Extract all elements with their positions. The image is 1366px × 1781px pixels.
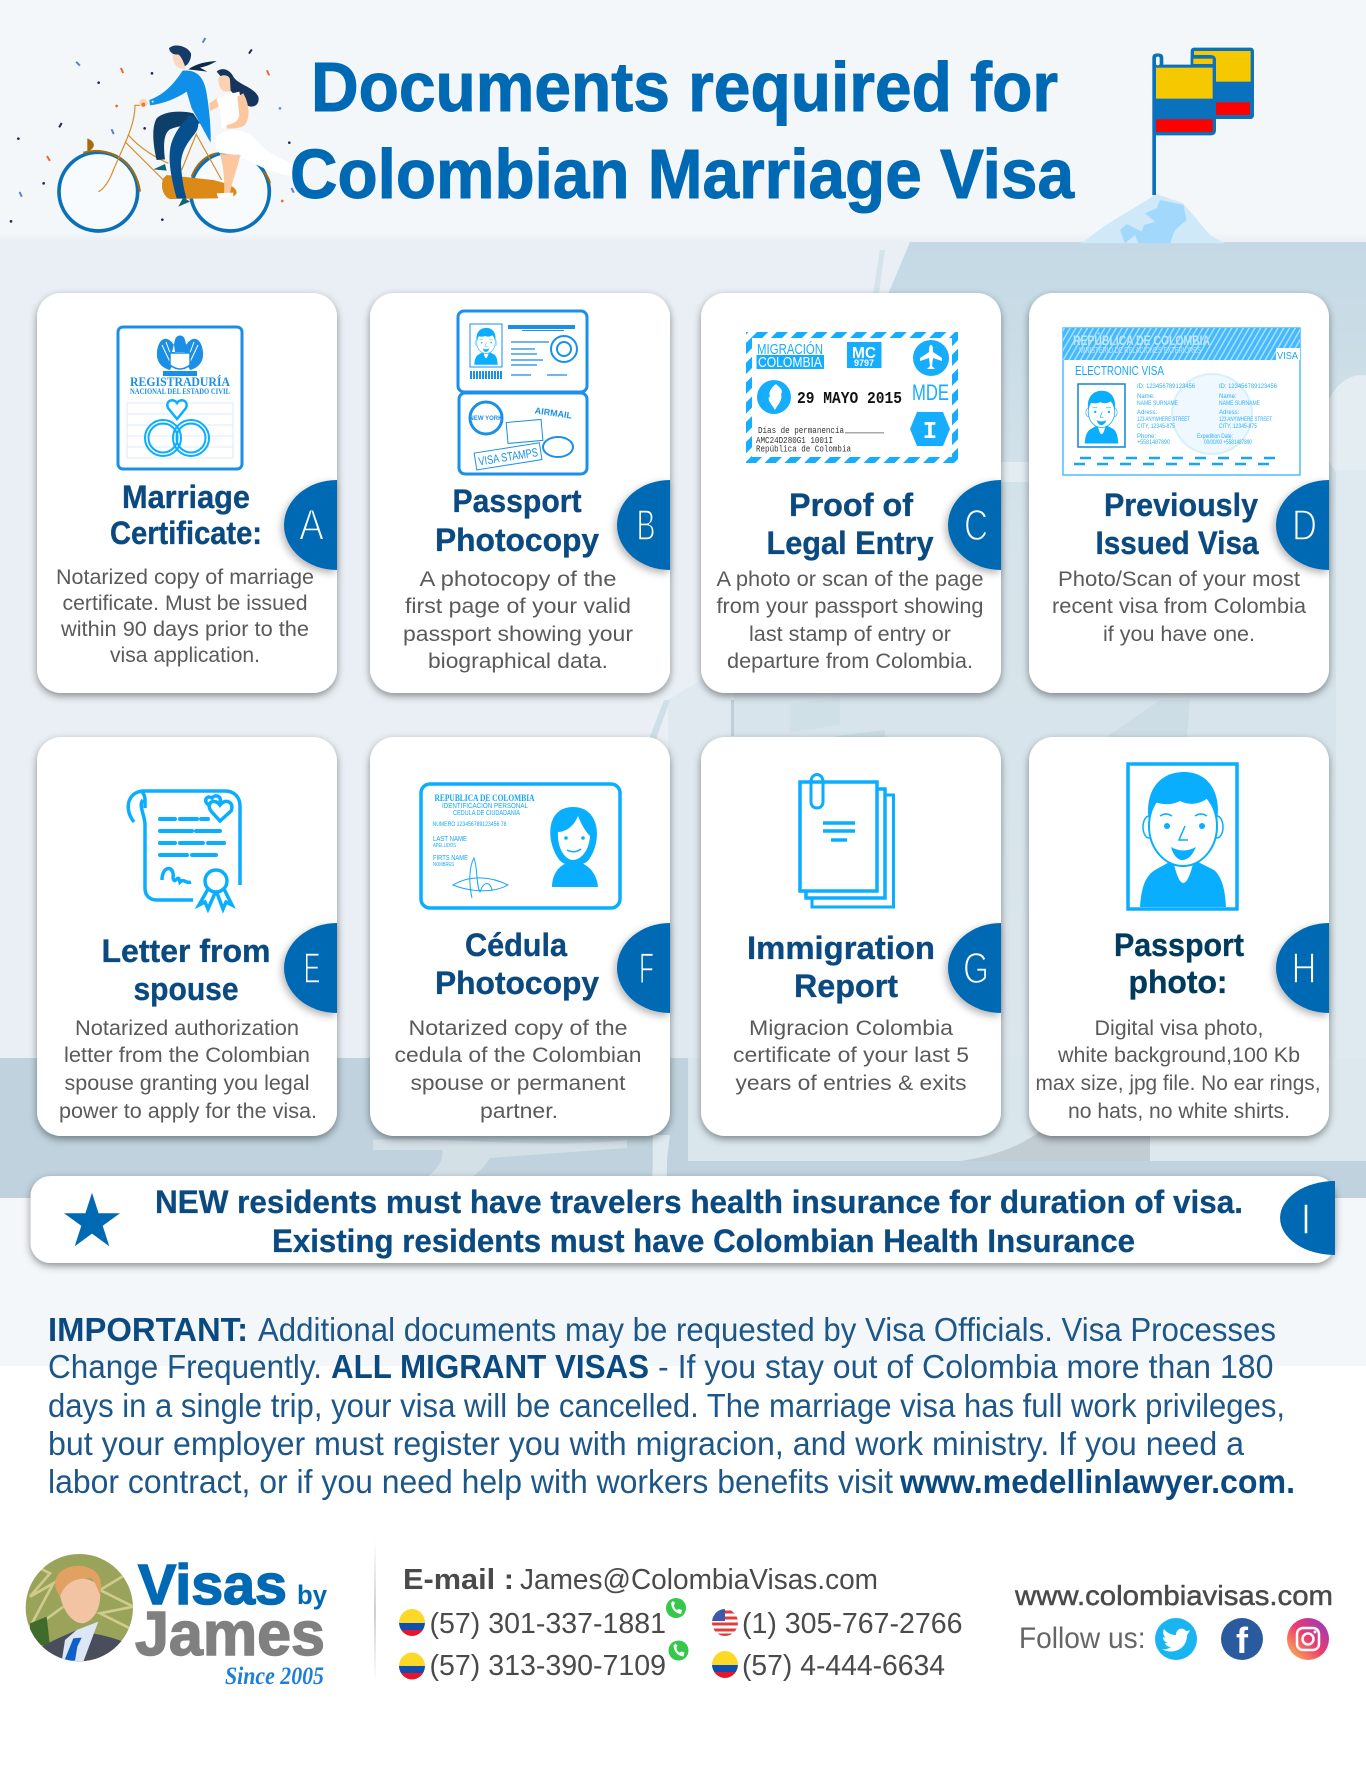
badge F	[617, 923, 670, 1013]
icon: cedula ID card: APELLIDOS	[433, 843, 457, 849]
panel: health insurance banner	[30, 1176, 1335, 1263]
email: James@ColombiaVisas.com	[520, 1564, 878, 1596]
icon: electronic visa: CITY, 12345-875	[1137, 424, 1176, 430]
logo: Visas by James with portrait: James	[135, 1600, 325, 1669]
badge G: G	[963, 944, 989, 993]
description: if you have one.	[1103, 623, 1255, 646]
description: Notarized authorization	[75, 1017, 299, 1040]
banner text: Existing residents must have Colombian Health Insurance	[272, 1223, 1135, 1259]
badge H	[1276, 923, 1329, 1013]
icon: cedula ID card: NUMERO 123456789123456 78	[432, 822, 507, 828]
heading: Previously	[1104, 487, 1258, 523]
important notice paragraph: days in a single trip, your visa will be cancelled. The marriage visa has full work privileges,	[48, 1387, 1285, 1424]
phone: Colombia 3: (57) 4-444-6634	[742, 1650, 945, 1682]
badge E: E	[304, 944, 320, 993]
phone: Colombia 2	[399, 1640, 688, 1682]
icon: electronic visa: 123 ANYWHERE STREET	[1219, 417, 1272, 423]
description	[59, 1017, 317, 1123]
icon: facebook	[1221, 1618, 1263, 1661]
icon: cedula ID card: IDENTIFICACIÓN PERSONAL	[442, 801, 528, 810]
heading: Immigration	[747, 930, 935, 966]
panel: G immigration report	[701, 737, 1001, 1136]
heading	[766, 487, 934, 561]
badge I	[1280, 1181, 1335, 1255]
icon: migration stamp: COLOMBIA	[758, 354, 822, 371]
icon: electronic visa: NAME SURNAME	[1219, 401, 1260, 407]
title: Documents required for	[311, 48, 1058, 126]
description: Migracion Colombia	[749, 1017, 953, 1040]
icon: cedula ID card: LAST NAME	[433, 836, 467, 843]
icon: twitter	[1155, 1618, 1197, 1660]
phone: USA: (1) 305-767-2766	[742, 1608, 962, 1640]
icon: passport pages: NEW YORK	[470, 416, 503, 422]
icon: migration stamp: MDE	[912, 380, 949, 405]
icon: passport pages	[458, 311, 587, 474]
description: last stamp of entry or	[749, 623, 951, 646]
icon: electronic visa: Name:	[1137, 394, 1155, 400]
description: first page of your valid	[405, 595, 631, 618]
description: partner.	[480, 1100, 558, 1123]
heading: photo:	[1128, 964, 1228, 1000]
description: Photo/Scan of your most	[1058, 568, 1300, 591]
badge H: H	[1292, 944, 1316, 993]
badge B: B	[636, 501, 656, 550]
contact details	[399, 1564, 962, 1682]
description: biographical data.	[428, 650, 608, 673]
panel: F cedula photocopy	[370, 737, 670, 1136]
icon: electronic visa: Adress:	[1219, 410, 1240, 416]
icon: stacked documents with paperclip	[800, 774, 894, 907]
panel: A marriage certificate	[37, 293, 337, 693]
description	[716, 568, 984, 673]
logo: Visas by James with portrait: Since 2005	[225, 1663, 324, 1690]
important notice paragraph: IMPORTANT:	[48, 1311, 248, 1348]
description: cedula of the Colombian	[394, 1044, 642, 1067]
description: departure from Colombia.	[727, 650, 973, 673]
description: Notarized copy of the	[408, 1017, 628, 1040]
description	[56, 566, 314, 667]
logo: Visas by James with portrait: Visas	[138, 1553, 287, 1617]
heading	[102, 933, 270, 1007]
description: from your passport showing	[716, 595, 984, 618]
important notice paragraph: - If you stay out of Colombia more than 180	[658, 1348, 1274, 1385]
heading	[1096, 487, 1259, 561]
heading	[435, 927, 599, 1001]
icon: migration stamp: MC	[852, 345, 876, 362]
badge D	[1276, 480, 1329, 570]
badge G	[948, 923, 1001, 1013]
icon: electronic visa: VISA	[1277, 351, 1298, 362]
heading: Marriage	[122, 479, 250, 515]
icon: electronic visa: ID: 123456789123456	[1219, 384, 1278, 390]
badge A: A	[299, 501, 325, 550]
icon: electronic visa: Phone:	[1137, 434, 1156, 440]
logo: Visas by James with portrait	[26, 1554, 327, 1684]
phone: Colombia 1: (57) 301-337-1881	[430, 1608, 666, 1640]
icon: electronic visa: REPÚBLICA DE COLOMBIA	[1073, 331, 1210, 348]
icon: certificate document: REGISTRADURÍA	[130, 374, 231, 389]
description: A photo or scan of the page	[716, 568, 984, 591]
important notice paragraph: ALL MIGRANT VISAS	[331, 1348, 649, 1385]
description: visa application.	[110, 644, 260, 667]
panel: B passport photocopy	[370, 293, 670, 693]
description: letter from the Colombian	[64, 1044, 310, 1067]
icon: migration stamp: MIGRACIÓN	[757, 341, 823, 358]
icon: electronic visa: ID: 123456789123456	[1137, 384, 1196, 390]
icon: migration stamp: República de Colombia	[756, 444, 851, 454]
important notice paragraph: www.medellinlawyer.com.	[899, 1463, 1295, 1500]
heading: Passport	[452, 483, 582, 519]
description: A photocopy of the	[420, 568, 616, 591]
heading: Issued Visa	[1096, 525, 1259, 561]
icon: electronic visa: Adress:	[1137, 410, 1158, 416]
icon: cedula ID card: CEDULA DE CIUDADANIA	[453, 810, 520, 817]
important notice paragraph: but your employer must register you with migracion, and work ministry. If you need a	[48, 1425, 1245, 1462]
icon: electronic visa: +5581487890	[1137, 440, 1171, 446]
icon: electronic visa: Expedition Date:	[1197, 434, 1233, 440]
description: passport showing your	[403, 623, 633, 646]
icon: passport pages: VISA STAMPS	[477, 445, 539, 468]
icon: certificate document	[118, 327, 242, 469]
icon: electronic visa	[1063, 328, 1300, 475]
illustration: couple riding a bicycle with confetti	[10, 38, 300, 231]
heading: Certificate:	[110, 515, 262, 551]
website and social links	[1014, 1580, 1333, 1661]
description: within 90 days prior to the	[60, 618, 309, 641]
icon: electronic visa: CITY, 12345-875	[1219, 424, 1258, 430]
heading: Photocopy	[435, 965, 599, 1001]
panel: D previously issued visa	[1029, 293, 1329, 693]
icon: electronic visa: 123 ANYWHERE STREET	[1137, 417, 1190, 423]
panel: C proof of legal entry	[701, 293, 1001, 693]
icon: certificate document: NACIONAL DEL ESTADO CIVIL	[130, 387, 230, 396]
icon: facebook: f	[1236, 1620, 1249, 1661]
icon: migration stamp: I	[923, 419, 937, 446]
icon: cedula ID card: FIRTS NAME	[433, 855, 468, 862]
description: years of entries & exits	[736, 1072, 966, 1095]
icon: electronic visa: NAME SURNAME	[1137, 401, 1178, 407]
badge A	[284, 480, 337, 570]
icon: cedula ID card	[421, 784, 620, 908]
icon: migration stamp: AMC24D280G1 1001I	[756, 436, 833, 446]
panel: H passport photo	[1029, 737, 1329, 1136]
icon: letter scroll with seal	[128, 791, 240, 909]
banner text	[155, 1184, 1243, 1259]
badge C	[948, 480, 1001, 570]
phone: Colombia 2: (57) 313-390-7109	[430, 1650, 666, 1682]
icon: migration stamp: 9797	[854, 358, 874, 368]
description	[1052, 568, 1306, 646]
heading	[110, 479, 262, 551]
website and social links: Follow us:	[1019, 1622, 1146, 1655]
title: Colombian Marriage Visa	[290, 135, 1075, 213]
email: E-mail :	[403, 1564, 514, 1596]
heading: Cédula	[465, 927, 567, 963]
badge F: F	[639, 944, 654, 993]
description: white background,100 Kb	[1057, 1044, 1300, 1067]
icon: migration stamp: Días de permanencia	[758, 426, 844, 436]
heading: Photocopy	[435, 522, 599, 558]
important notice paragraph: Additional documents may be requested by Visa Officials. Visa Processes	[258, 1311, 1276, 1348]
description: recent visa from Colombia	[1052, 595, 1306, 618]
description: certificate. Must be issued	[62, 592, 308, 615]
title	[290, 48, 1075, 213]
logo: Visas by James with portrait: by	[297, 1580, 327, 1610]
description: max size, jpg file. No ear rings,	[1036, 1072, 1320, 1095]
phone: Colombia 1	[399, 1598, 686, 1640]
description: no hats, no white shirts.	[1068, 1100, 1290, 1123]
description	[403, 568, 633, 673]
description: spouse granting you legal	[64, 1072, 310, 1095]
heading	[747, 930, 935, 1004]
icon: migration stamp	[749, 335, 955, 460]
description	[733, 1017, 969, 1095]
icon: Colombian flag on a mountain	[1082, 48, 1254, 243]
icon: passport pages: AIRMAIL	[534, 405, 573, 421]
icon: cedula ID card: REPUBLICA DE COLOMBIA	[434, 793, 535, 803]
icon: electronic visa: Name:	[1219, 394, 1237, 400]
badge D: D	[1292, 501, 1317, 550]
heading: Report	[794, 968, 898, 1004]
description: spouse or permanent	[410, 1072, 626, 1095]
heading: Proof of	[789, 487, 913, 523]
icon: instagram	[1287, 1618, 1329, 1660]
description	[1036, 1017, 1320, 1123]
heading: Legal Entry	[766, 525, 934, 561]
heading: Passport	[1114, 927, 1244, 963]
heading	[1114, 927, 1244, 1000]
description	[394, 1017, 642, 1123]
heading: spouse	[134, 971, 238, 1007]
icon: migration stamp: 29 MAYO 2015	[797, 390, 902, 409]
badge B	[617, 480, 670, 570]
icon: portrait photo	[1128, 764, 1237, 909]
icon: electronic visa: 00/00/00 +5581487890	[1204, 440, 1253, 446]
important notice paragraph: labor contract, or if you need help with workers benefits visit	[48, 1463, 893, 1500]
description: certificate of your last 5	[733, 1044, 969, 1067]
description: power to apply for the visa.	[59, 1100, 317, 1123]
badge C: C	[964, 501, 988, 550]
badge I: I	[1300, 1195, 1312, 1244]
heading	[435, 483, 599, 558]
important notice paragraph	[48, 1311, 1295, 1500]
icon: electronic visa: ELECTRONIC VISA	[1075, 363, 1164, 378]
banner text: NEW residents must have travelers health insurance for duration of visa.	[155, 1184, 1243, 1220]
description: Digital visa photo,	[1094, 1017, 1264, 1040]
website and social links: www.colombiavisas.com	[1014, 1580, 1333, 1611]
portrait photo	[26, 1554, 133, 1662]
icon: cedula ID card: NOMBRES	[433, 862, 455, 868]
badge E	[284, 923, 337, 1013]
panel: E letter from spouse	[37, 737, 337, 1136]
important notice paragraph: Change Frequently.	[48, 1348, 322, 1385]
description: Notarized copy of marriage	[56, 566, 314, 589]
icon: electronic visa: MINISTERIO DE RELACIONES EXTERIORES	[1079, 346, 1201, 355]
icon: star	[64, 1193, 120, 1246]
heading: Letter from	[102, 933, 270, 969]
